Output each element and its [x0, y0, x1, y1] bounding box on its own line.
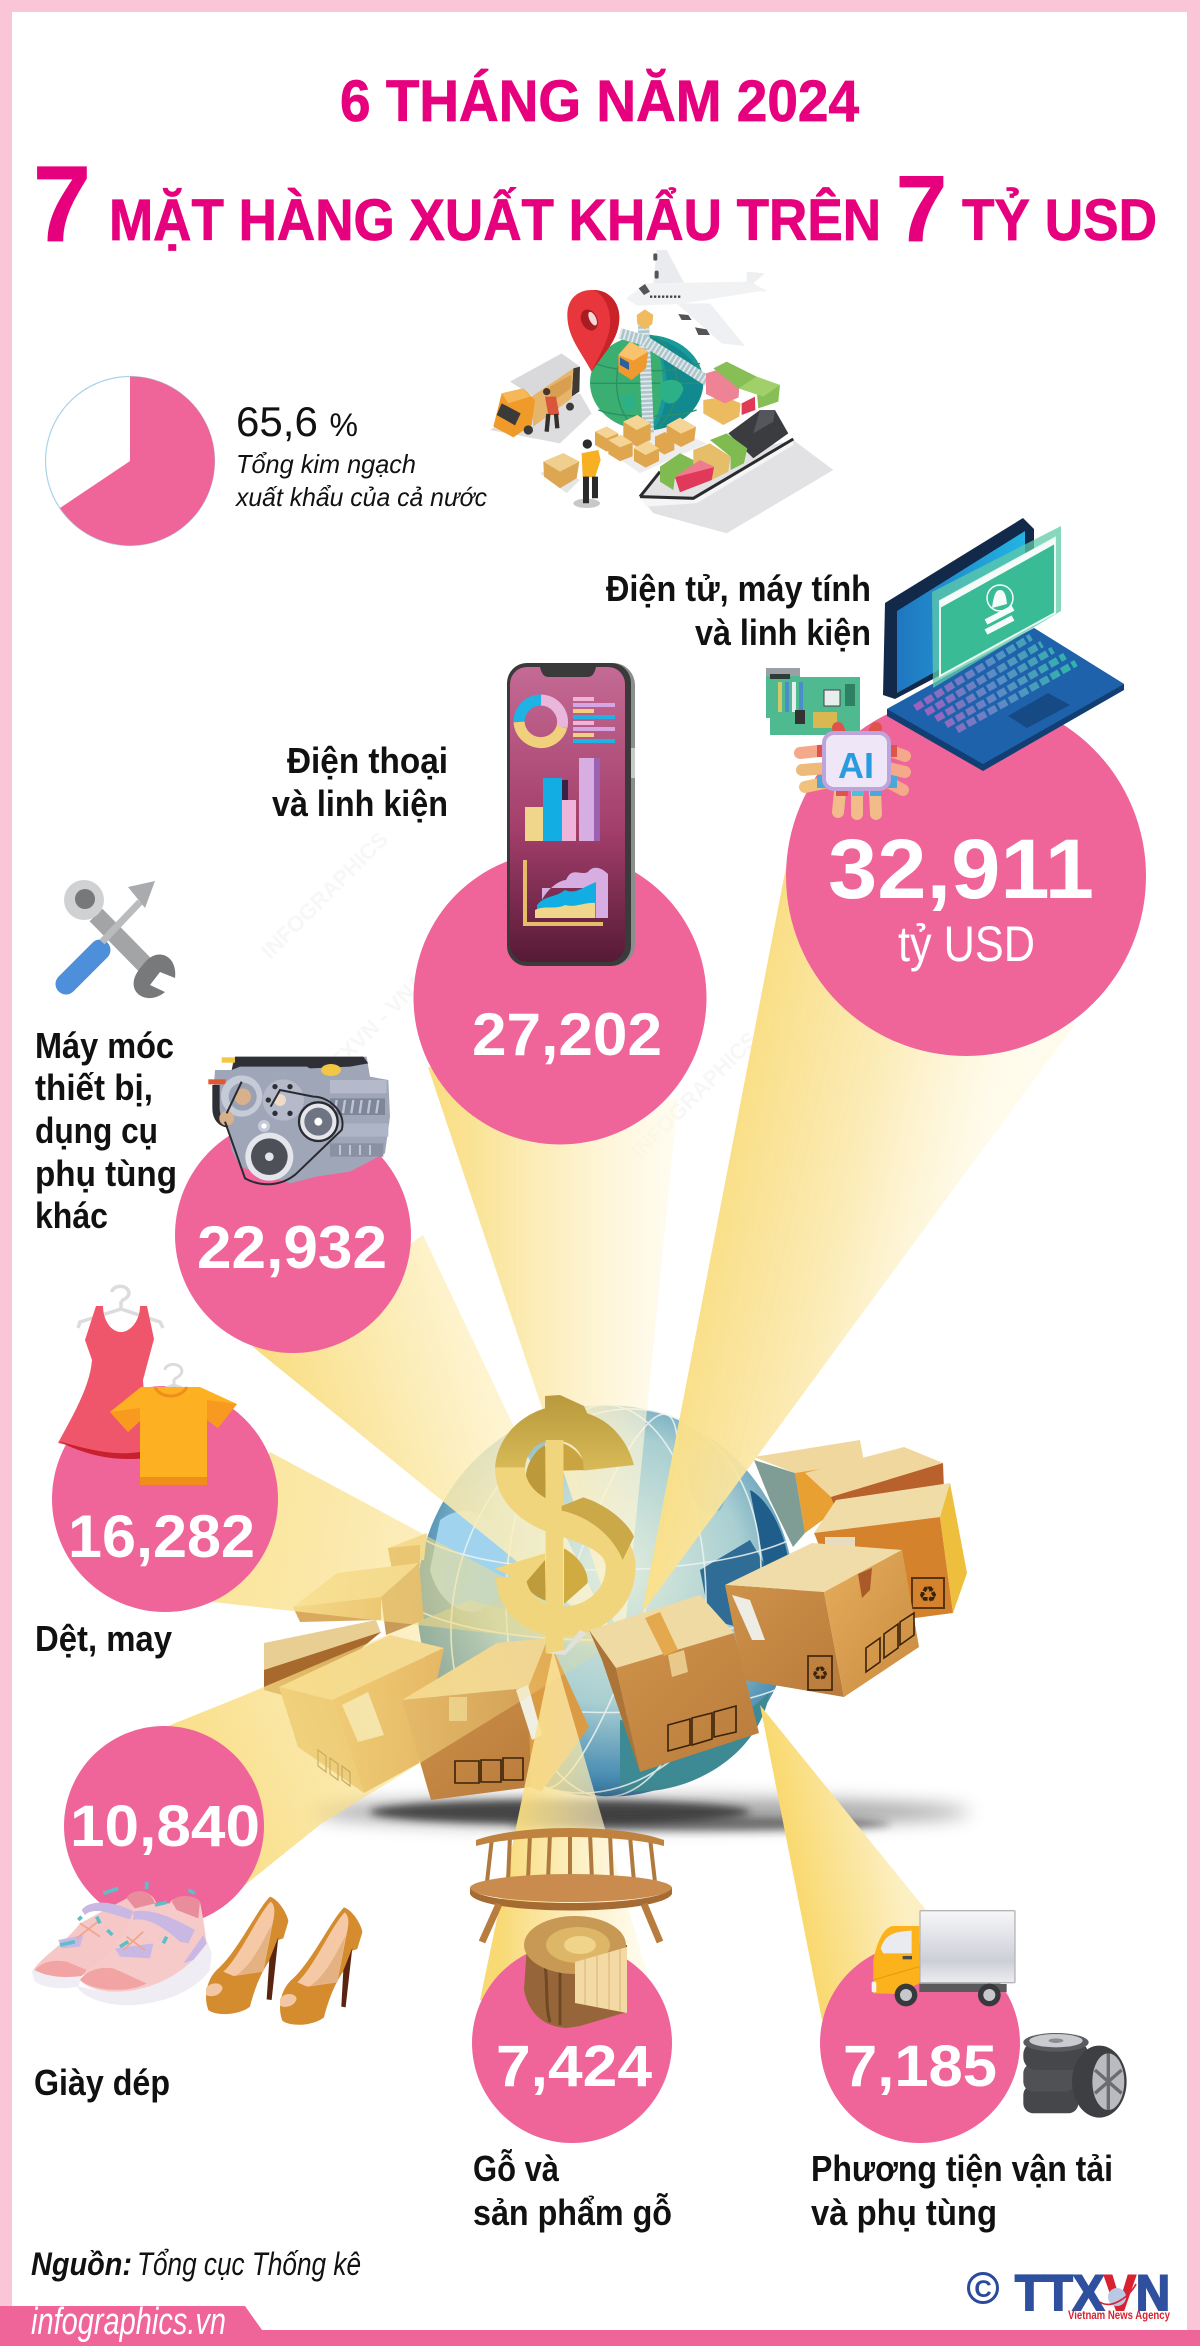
icon: AI chip — [800, 728, 905, 814]
box: front centre — [589, 1595, 759, 1772]
globe — [403, 1368, 809, 1834]
pin — [567, 290, 619, 372]
ship — [640, 440, 793, 507]
circle: phones — [414, 852, 706, 1144]
watermark: TTXVN - VNA — [316, 968, 431, 1084]
watermark: INFOGRAPHICS — [626, 1027, 763, 1164]
pie caption: Tổng kim ngạch — [236, 449, 416, 479]
pie chart: 65,6% — [46, 376, 215, 546]
label: vehicles: và phụ tùng — [811, 2192, 997, 2233]
value: 32,911 — [828, 822, 1094, 972]
circle: vehicles — [820, 1943, 1020, 2143]
box: centre-left — [402, 1638, 589, 1800]
airplane — [653, 250, 684, 284]
headline: TỶ USD — [962, 188, 1157, 253]
globe — [590, 335, 703, 430]
label: phones — [272, 740, 448, 824]
value: 7,185: 7,185 — [843, 2034, 997, 2099]
icon: tyres — [1023, 2033, 1127, 2118]
circle: footwear — [64, 1726, 264, 1926]
source: Tổng cục Thống kê — [137, 2246, 361, 2282]
label: machinery: phụ tùng — [35, 1153, 177, 1194]
boxes: back-right stack — [754, 1440, 967, 1620]
icon: gold dollar sign — [495, 1395, 634, 1655]
box: left — [279, 1635, 444, 1793]
label: electronics — [606, 568, 871, 653]
title: 6 tháng năm 2024: 6 THÁNG NĂM 2024 — [340, 69, 859, 134]
label: phones: và linh kiện — [272, 783, 448, 824]
cart and worker — [543, 453, 579, 488]
icon: laptop — [883, 518, 1124, 771]
headline: 7 — [896, 156, 947, 261]
icon: tree stump — [524, 1916, 627, 2028]
label: textiles: Dệt, may — [35, 1618, 172, 1659]
icon: delivery truck — [872, 1911, 1015, 2006]
box: big right-front — [725, 1543, 919, 1697]
label: phones: Điện thoại — [287, 740, 448, 781]
crane lattice — [643, 320, 648, 433]
value: 22,932: 22,932 — [197, 1214, 387, 1281]
box: big right-front: ♻ — [811, 1664, 829, 1685]
logo: TTXVN: C — [974, 2276, 992, 2303]
yellow rays — [168, 867, 1075, 2020]
icon: logistics illustration — [490, 250, 833, 533]
icon: wooden bench — [470, 1828, 672, 1942]
label: machinery: thiết bị, — [35, 1067, 153, 1108]
ground shadow — [310, 1798, 970, 1831]
circle: machinery — [175, 1117, 411, 1353]
pie caption: xuất khẩu của cả nước — [234, 482, 487, 512]
value: 27,202: 27,202 — [472, 1001, 662, 1068]
boxes: back-right stack: ♻ — [918, 1582, 938, 1607]
label: vehicles — [811, 2148, 1113, 2233]
icon: car engine — [208, 1057, 390, 1184]
value: 16,282: 16,282 — [68, 1503, 255, 1570]
icon: sneakers and high heels — [32, 1882, 362, 2025]
icon: circuit board — [766, 668, 860, 735]
icon: wrench and screwdriver — [64, 880, 175, 998]
label: wood — [473, 2148, 672, 2233]
headline — [33, 143, 1157, 264]
containers — [703, 397, 741, 425]
source: Nguồn: — [31, 2246, 132, 2282]
tan boxes — [595, 415, 696, 468]
logo: TTXVN: TTXVN — [1015, 2265, 1170, 2321]
value: 32,911: tỷ USD — [898, 916, 1035, 972]
label: electronics: Điện tử, máy tính — [606, 568, 871, 609]
label: vehicles: Phương tiện vận tải — [811, 2148, 1113, 2189]
footer bar — [0, 2301, 1200, 2346]
watermark: INFOGRAPHICS — [256, 827, 393, 964]
circle: textiles — [52, 1386, 278, 1612]
label: electronics: và linh kiện — [695, 612, 871, 653]
icon: dress and t-shirt — [58, 1286, 237, 1485]
label: wood: sản phẩm gỗ — [473, 2192, 672, 2233]
value: 7,424: 7,424 — [496, 2034, 652, 2099]
value: 10,840: 10,840 — [70, 1794, 260, 1859]
icon: smartphone — [507, 663, 635, 966]
label: footwear: Giày dép — [34, 2062, 170, 2103]
value: 32,911: 32,911 — [828, 822, 1094, 916]
label: machinery: dụng cụ — [35, 1110, 158, 1151]
crane boxes — [618, 342, 648, 380]
circle: wood — [472, 1943, 672, 2143]
circle: electronics — [786, 696, 1146, 1056]
headline: MẶT HÀNG XUẤT KHẨU TRÊN — [109, 188, 881, 253]
pie caption: 65,6 % — [236, 398, 358, 445]
boxes: back-left stack — [264, 1533, 427, 1700]
label: wood: Gỗ và — [473, 2148, 560, 2189]
headline: 7 — [33, 143, 91, 264]
label: machinery: khác — [35, 1195, 108, 1236]
label: machinery: Máy móc — [35, 1025, 174, 1066]
source — [31, 2246, 361, 2282]
watermark: INFOGRAPHICS — [766, 1017, 903, 1154]
watermark — [256, 827, 903, 1164]
pie caption — [234, 398, 487, 512]
icon: AI chip: AI — [838, 745, 874, 786]
truck — [510, 353, 580, 397]
footer bar: infographics.vn — [31, 2301, 226, 2343]
logo: TTXVN: Vietnam News Agency — [1068, 2308, 1170, 2322]
label: machinery — [35, 1025, 177, 1236]
